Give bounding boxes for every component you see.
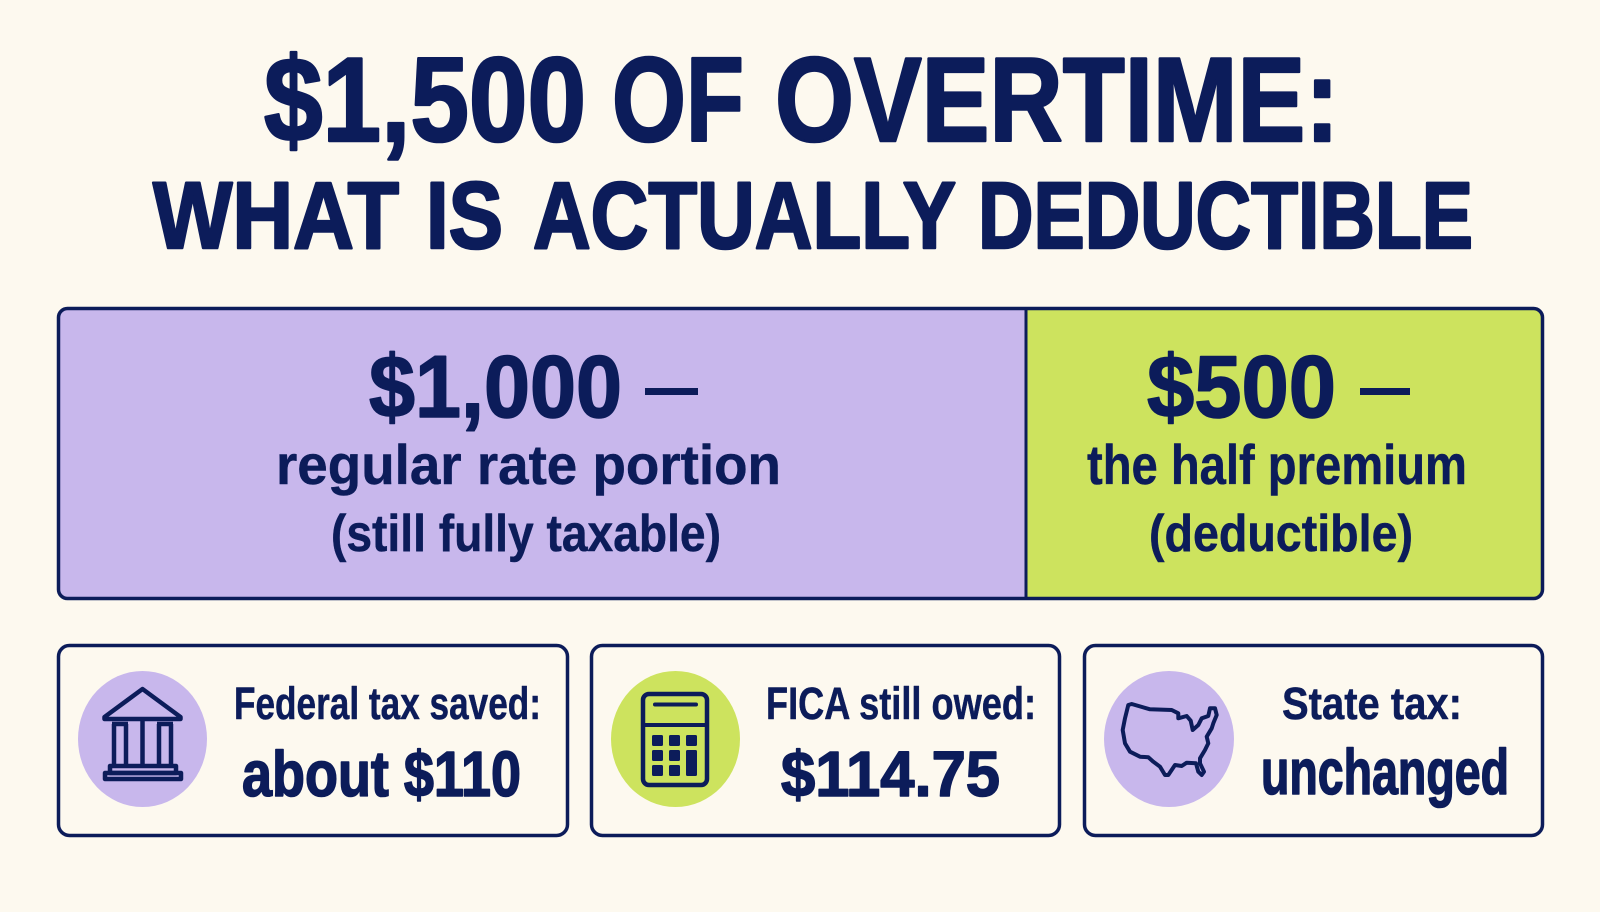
text: FICA still owed: $114.75 bbox=[781, 738, 1000, 810]
title: WHAT bbox=[153, 163, 399, 269]
segment: regular rate portion: (still fully taxable) bbox=[331, 505, 721, 563]
text: FICA still owed: FICA still owed: bbox=[766, 678, 1036, 729]
title: $1,500 bbox=[264, 33, 586, 167]
segment: regular rate portion: $1,000 bbox=[369, 337, 622, 436]
title: ACTUALLY bbox=[533, 163, 956, 269]
title: IS bbox=[426, 163, 503, 269]
text: federal tax saved: Federal tax saved: bbox=[234, 678, 541, 729]
icon: USA map bbox=[1104, 671, 1234, 807]
panel: FICA still owed bbox=[592, 646, 1060, 836]
segment: half premium: $500 bbox=[1147, 337, 1336, 436]
segment: regular rate portion: regular rate portion bbox=[276, 433, 781, 496]
segment: half premium bbox=[1025, 308, 1542, 598]
panel: state tax bbox=[1084, 646, 1542, 836]
text: federal tax saved bbox=[234, 678, 541, 810]
text: federal tax saved: about $110 bbox=[242, 738, 521, 810]
title: OVERTIME: bbox=[775, 33, 1339, 167]
segment: half premium: (deductible) bbox=[1149, 505, 1413, 563]
segment: regular rate portion bbox=[58, 308, 1025, 598]
title: OF bbox=[612, 33, 744, 167]
text: state tax bbox=[1261, 678, 1509, 808]
panel: overtime split bar bbox=[58, 308, 1542, 598]
text: state tax: State tax: bbox=[1282, 678, 1462, 729]
text: state tax: unchanged bbox=[1261, 736, 1509, 808]
title bbox=[153, 33, 1473, 269]
icon: bank building bbox=[78, 671, 207, 807]
panel: federal tax saved bbox=[58, 646, 568, 836]
icon: calculator bbox=[611, 671, 740, 807]
segment: half premium: the half premium bbox=[1087, 433, 1467, 496]
text: FICA still owed bbox=[766, 678, 1036, 810]
title: DEDUCTIBLE bbox=[978, 163, 1473, 269]
